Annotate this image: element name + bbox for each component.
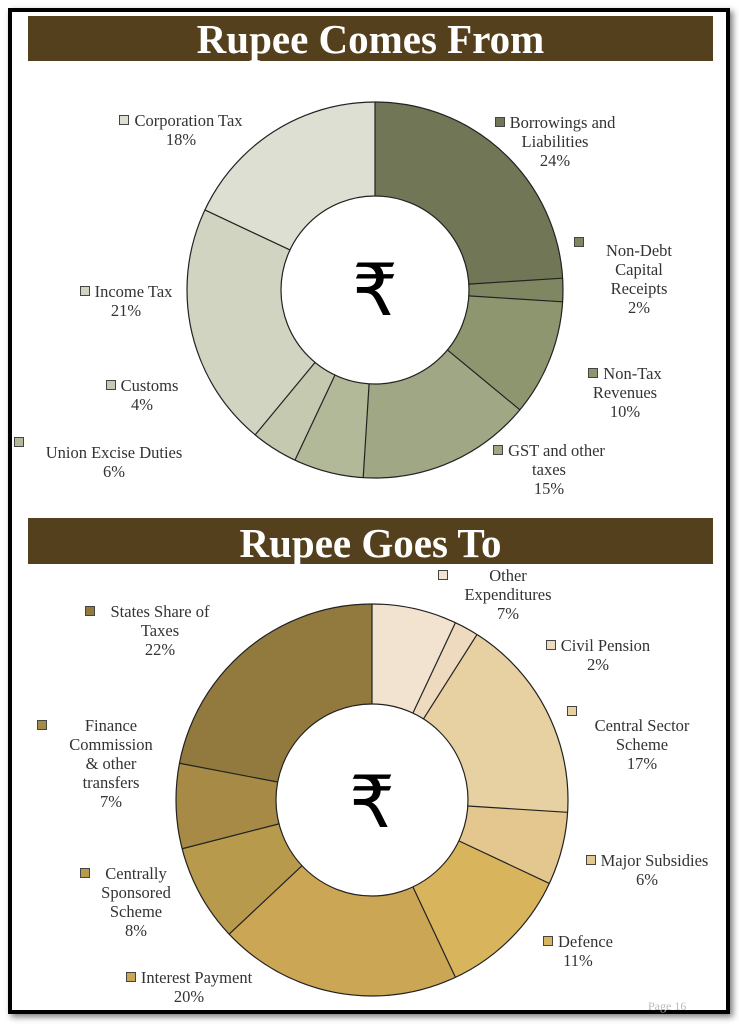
label: income tax: 21% bbox=[111, 301, 141, 320]
label: non-tax bbox=[588, 364, 662, 421]
label: other expenditures bbox=[438, 566, 552, 623]
donut chart: rupee comes from bbox=[234, 149, 516, 431]
label: defence: 11% bbox=[563, 951, 593, 970]
label: defence bbox=[543, 932, 613, 970]
label: states share: States Share of bbox=[110, 602, 209, 621]
label: central sector: Scheme bbox=[616, 735, 668, 754]
label: non-tax: Revenues bbox=[593, 383, 657, 402]
icon: rupee sign bottom: ₹ bbox=[349, 760, 395, 844]
label: borrowings: Liabilities bbox=[522, 132, 588, 151]
label: non-tax: Non-Tax bbox=[603, 364, 662, 383]
label: non-debt: Non-Debt bbox=[606, 241, 672, 260]
label: gst bbox=[493, 441, 605, 498]
label: civil pension bbox=[546, 636, 650, 674]
label: central sector: Central Sector bbox=[595, 716, 689, 735]
label: civil pension: Civil Pension bbox=[561, 636, 650, 655]
label: major subsidies bbox=[586, 851, 708, 889]
label: central sector bbox=[567, 706, 690, 773]
donut chart: rupee goes to bbox=[226, 654, 518, 946]
label: finance commission: Finance bbox=[85, 716, 137, 735]
label: gst: 15% bbox=[534, 479, 564, 498]
label: interest payment bbox=[126, 968, 252, 1006]
label: corporation tax: Corporation Tax bbox=[134, 111, 243, 130]
title: rupee comes from bbox=[28, 16, 713, 61]
title: rupee goes to bbox=[28, 518, 713, 564]
label: states share: 22% bbox=[145, 640, 175, 659]
label: gst: GST and other bbox=[508, 441, 605, 460]
label: corporation tax: 18% bbox=[166, 130, 196, 149]
label: non-debt: Capital bbox=[615, 260, 663, 279]
label: income tax bbox=[80, 282, 172, 320]
page number: Page 16 bbox=[648, 999, 686, 1013]
label: finance commission: 7% bbox=[100, 792, 122, 811]
label: customs bbox=[106, 376, 178, 414]
label: customs: Customs bbox=[121, 376, 178, 395]
label: major subsidies: 6% bbox=[636, 870, 658, 889]
label: centrally sponsored: 8% bbox=[125, 921, 147, 940]
label: corporation tax bbox=[119, 111, 243, 149]
label: customs: 4% bbox=[131, 395, 153, 414]
label: central sector: 17% bbox=[627, 754, 657, 773]
label: states share: Taxes bbox=[141, 621, 179, 640]
label: union excise: 6% bbox=[103, 462, 125, 481]
label: states share bbox=[85, 602, 210, 659]
label: borrowings: 24% bbox=[540, 151, 570, 170]
icon: rupee sign top: ₹ bbox=[352, 248, 398, 332]
label: non-debt: 2% bbox=[628, 298, 650, 317]
label: centrally sponsored: Scheme bbox=[110, 902, 162, 921]
label: interest payment: Interest Payment bbox=[141, 968, 252, 987]
title: rupee comes from: Rupee Comes From bbox=[197, 16, 544, 62]
title: rupee goes to: Rupee Goes To bbox=[240, 520, 502, 566]
label: centrally sponsored: Centrally bbox=[105, 864, 167, 883]
label: borrowings: Borrowings and bbox=[510, 113, 615, 132]
label: centrally sponsored bbox=[80, 864, 171, 940]
label: centrally sponsored: Sponsored bbox=[101, 883, 171, 902]
label: major subsidies: Major Subsidies bbox=[601, 851, 708, 870]
label: borrowings bbox=[495, 113, 616, 170]
label: defence: Defence bbox=[558, 932, 613, 951]
label: other expenditures: Other bbox=[489, 566, 527, 585]
label: other expenditures: Expenditures bbox=[464, 585, 552, 604]
label: non-debt bbox=[574, 237, 672, 317]
label: union excise bbox=[14, 437, 182, 481]
label: non-tax: 10% bbox=[610, 402, 640, 421]
label: finance commission bbox=[37, 716, 153, 811]
label: finance commission: & other bbox=[86, 754, 136, 773]
label: interest payment: 20% bbox=[174, 987, 204, 1006]
label: civil pension: 2% bbox=[587, 655, 609, 674]
label: income tax: Income Tax bbox=[95, 282, 172, 301]
label: finance commission: transfers bbox=[83, 773, 139, 792]
label: gst: taxes bbox=[532, 460, 566, 479]
label: finance commission: Commission bbox=[69, 735, 153, 754]
label: union excise: Union Excise Duties bbox=[46, 443, 182, 462]
label: non-debt: Receipts bbox=[611, 279, 667, 298]
label: other expenditures: 7% bbox=[497, 604, 519, 623]
